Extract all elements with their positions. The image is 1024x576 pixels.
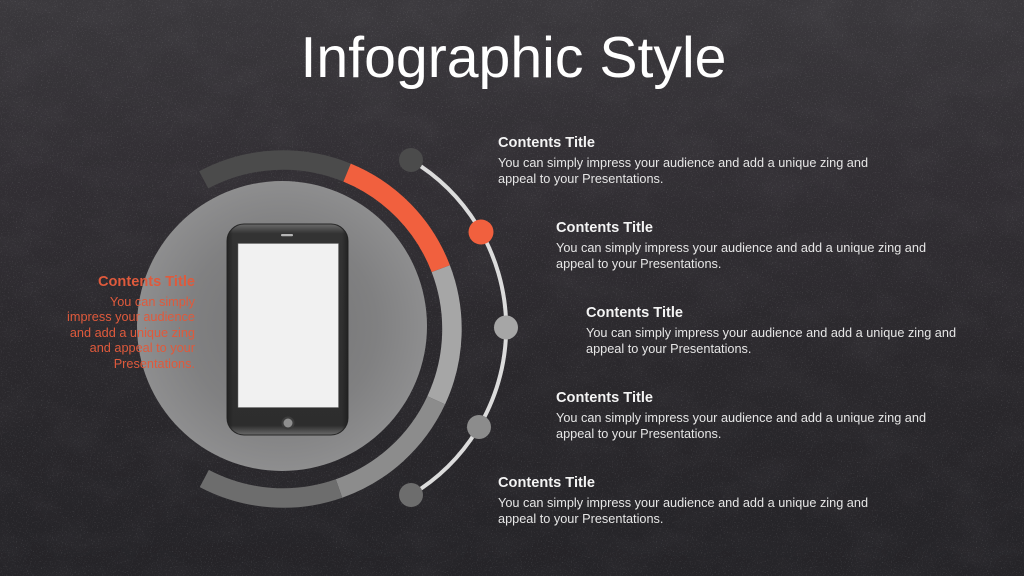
ring segment: orange bbox=[347, 173, 441, 269]
ring segment: light grey bbox=[436, 269, 452, 400]
text block 2: You can simply impress your audience and add a unique zing and bbox=[556, 240, 926, 255]
title: Infographic Style bbox=[300, 26, 726, 90]
text block 1 bbox=[498, 135, 868, 186]
text block 4: You can simply impress your audience and add a unique zing and bbox=[556, 410, 926, 425]
connector arc bbox=[411, 160, 506, 495]
node 1 bbox=[399, 148, 423, 172]
text block 5: Contents Title bbox=[498, 475, 595, 491]
left callout text bbox=[67, 274, 195, 371]
left callout body: impress your audience bbox=[67, 309, 195, 324]
left callout body: You can simply bbox=[110, 294, 195, 309]
node 4 bbox=[467, 415, 491, 439]
text block 3: Contents Title bbox=[586, 305, 683, 321]
text block 3: You can simply impress your audience and add a unique zing and bbox=[586, 325, 956, 340]
left callout body bbox=[67, 294, 195, 371]
grey disc bbox=[137, 181, 427, 471]
text block 5: appeal to your Presentations. bbox=[498, 511, 663, 526]
icon: smartphone bbox=[227, 224, 348, 435]
segmented ring bbox=[204, 160, 452, 498]
text block 5: You can simply impress your audience and add a unique zing and bbox=[498, 495, 868, 510]
left callout body: and add a unique zing bbox=[70, 325, 195, 340]
ring segment: mid grey bbox=[339, 400, 436, 488]
node 2 bbox=[468, 220, 494, 244]
text block 1: appeal to your Presentations. bbox=[498, 171, 663, 186]
left callout heading: Contents Title bbox=[98, 274, 195, 290]
ring segment: darker grey bbox=[204, 478, 339, 498]
text block 1: Contents Title bbox=[498, 135, 595, 151]
text block 5 bbox=[498, 475, 868, 526]
left callout body: Presentations. bbox=[114, 356, 195, 371]
text block 3: appeal to your Presentations. bbox=[586, 341, 751, 356]
text block 4: Contents Title bbox=[556, 390, 653, 406]
text block 4: appeal to your Presentations. bbox=[556, 426, 721, 441]
left callout body: and appeal to your bbox=[90, 340, 195, 355]
text block 2 bbox=[556, 220, 926, 271]
text block 2: Contents Title bbox=[556, 220, 653, 236]
text block 4 bbox=[556, 390, 926, 441]
node 5 bbox=[399, 483, 423, 507]
text block 1: You can simply impress your audience and add a unique zing and bbox=[498, 155, 868, 170]
node 3 bbox=[494, 316, 518, 340]
text block 3 bbox=[586, 305, 956, 356]
ring segment: dark grey bbox=[204, 160, 347, 180]
text block 2: appeal to your Presentations. bbox=[556, 256, 721, 271]
